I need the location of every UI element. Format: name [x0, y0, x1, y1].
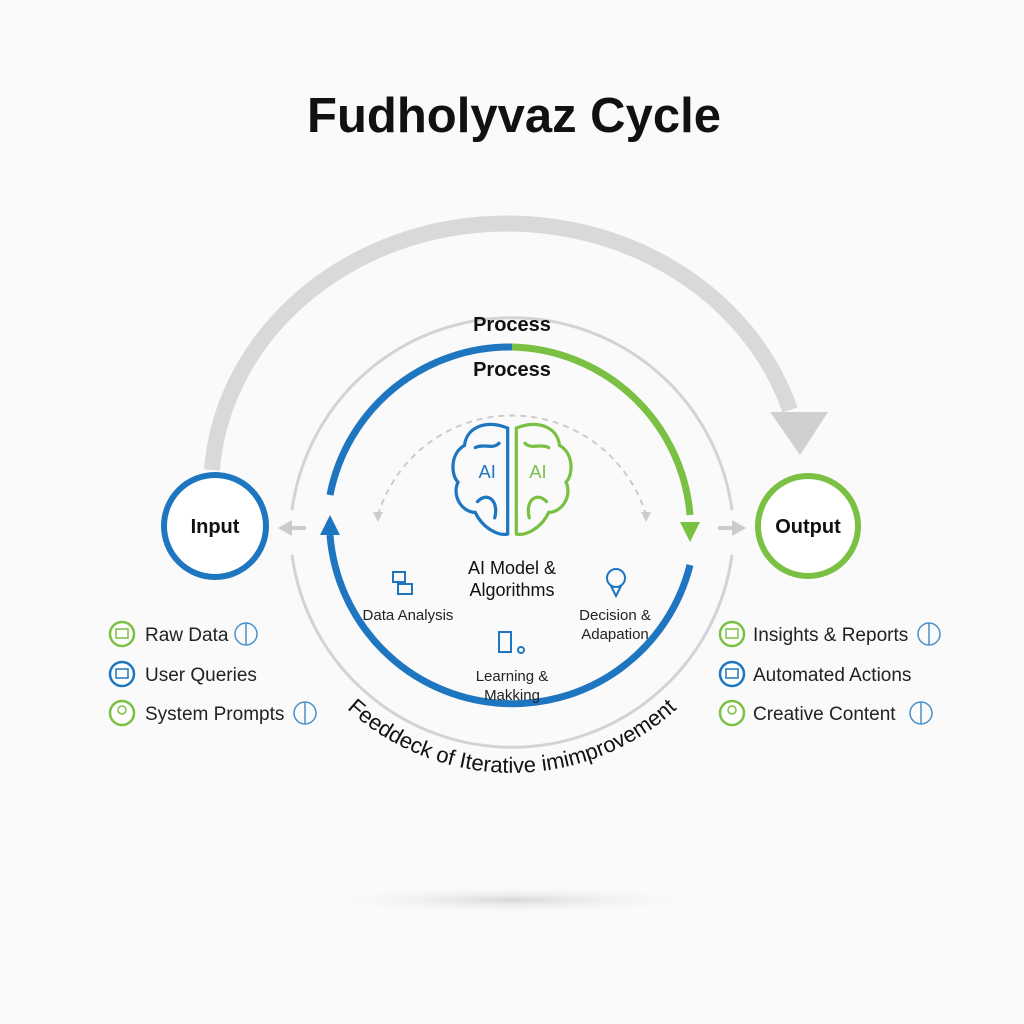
- input list: User Queries: [145, 665, 257, 686]
- sub: learning: Makking: [484, 687, 540, 704]
- icon: brain: [453, 424, 571, 534]
- icon: brain: AI: [478, 461, 496, 482]
- center label: AI Model &: [468, 558, 556, 578]
- input list: System Prompts: [145, 704, 284, 725]
- sub: data analysis: [363, 572, 453, 624]
- output list: [720, 622, 940, 725]
- feedback arc text: Feeddeck of Iterative imimprovement: [348, 698, 677, 773]
- icon: brain: AI: [529, 461, 547, 482]
- output node: [758, 476, 858, 576]
- sub: learning: [476, 632, 548, 704]
- dashed inner arc: [373, 416, 651, 522]
- text: Algorithms: [469, 580, 555, 600]
- big gray return arrow: [212, 223, 828, 470]
- sub: decision: Adapation: [581, 626, 649, 643]
- output list: Creative Content: [753, 704, 896, 725]
- process labels: Process: [473, 314, 551, 336]
- sub: decision: [579, 569, 651, 643]
- sub: decision: Decision &: [579, 607, 651, 624]
- outer gray ring: [292, 318, 732, 747]
- input list: Raw Data: [145, 625, 229, 646]
- text: Process: [473, 359, 551, 381]
- output list: Insights & Reports: [753, 625, 908, 646]
- title: Fudholyvaz Cycle: [307, 89, 721, 143]
- input node: Input: [191, 516, 240, 538]
- input node: [164, 475, 266, 577]
- small side arrows: [278, 520, 746, 536]
- input list: [110, 622, 316, 725]
- sub: data analysis: Data Analysis: [363, 607, 453, 624]
- sub: learning: Learning &: [476, 668, 548, 685]
- output node: Output: [775, 516, 841, 538]
- floor shadow: [312, 886, 712, 914]
- output list: Automated Actions: [753, 665, 911, 686]
- process ring: [320, 347, 700, 704]
